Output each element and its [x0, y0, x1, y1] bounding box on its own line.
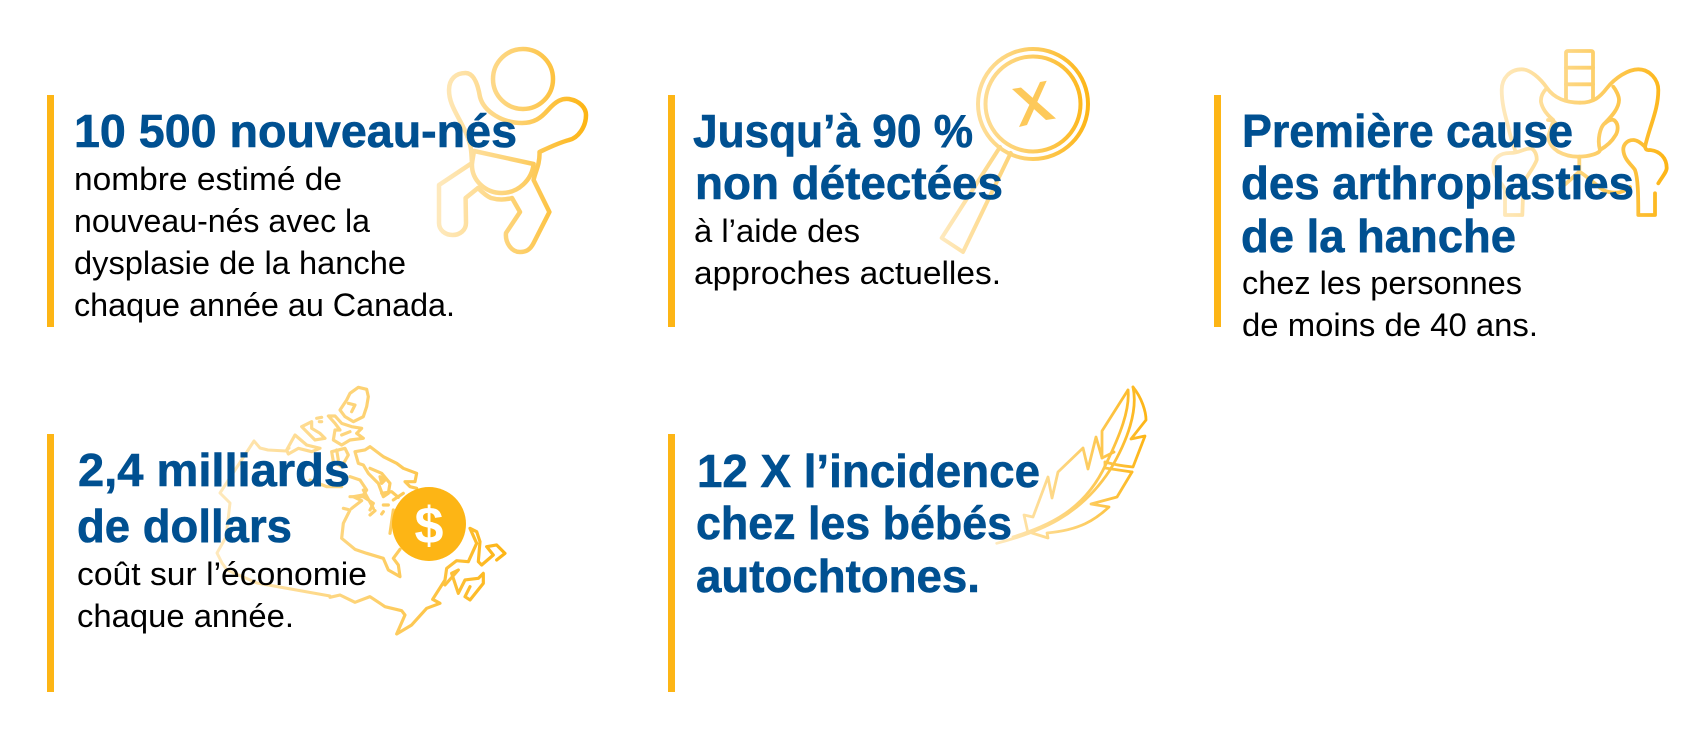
heading: 12 X l’incidence [697, 445, 1040, 497]
dollar sign: $ [415, 497, 444, 555]
accent bar [668, 434, 675, 692]
description: coût sur l’économie [77, 556, 367, 592]
description: chez les personnes [1242, 265, 1522, 301]
description: à l’aide des [694, 213, 860, 249]
southern coast [330, 490, 505, 634]
icon: feather [997, 387, 1146, 543]
description [77, 556, 367, 634]
description: nombre estimé de [74, 161, 342, 197]
description [1242, 265, 1538, 343]
panel: coût économique [47, 387, 505, 692]
description: de moins de 40 ans. [1242, 307, 1538, 343]
panel: coût économique: de dollars [77, 500, 292, 552]
heading: 2,4 milliards [78, 444, 350, 496]
panel: arthroplasties [1214, 51, 1667, 343]
accent bar [1214, 95, 1221, 327]
panel: non détectées: non détectées [695, 157, 1003, 209]
heading: Première cause [1242, 105, 1573, 157]
accent bar [668, 95, 675, 327]
accent bar [47, 95, 54, 327]
panel: arthroplasties: des arthroplasties [1241, 157, 1634, 209]
heading: 10 500 nouveau-nés [74, 105, 517, 157]
heading: Jusqu’à 90 % [693, 105, 973, 157]
description [694, 213, 1001, 291]
panel: non détectées [668, 49, 1088, 327]
panel: arthroplasties: de la hanche [1241, 210, 1516, 262]
description: dysplasie de la hanche [74, 245, 406, 281]
panel: bébés autochtones: chez les bébés [696, 497, 1012, 549]
icon: magnifying glass [942, 49, 1088, 252]
description [74, 161, 455, 323]
west border [217, 441, 330, 596]
accent bar [47, 434, 54, 692]
northern islands [287, 387, 417, 508]
description: chaque année. [77, 598, 294, 634]
panel: nouveau-nés [47, 49, 586, 327]
description: chaque année au Canada. [74, 287, 455, 323]
description: nouveau-nés avec la [74, 203, 370, 239]
icon: map of Canada with dollar coin [217, 387, 505, 634]
coin [392, 487, 466, 561]
panel: bébés autochtones [668, 387, 1146, 692]
icon: baby [439, 49, 586, 252]
description: approches actuelles. [694, 255, 1001, 291]
panel: bébés autochtones: autochtones. [696, 550, 980, 602]
icon: pelvis [1493, 51, 1667, 215]
